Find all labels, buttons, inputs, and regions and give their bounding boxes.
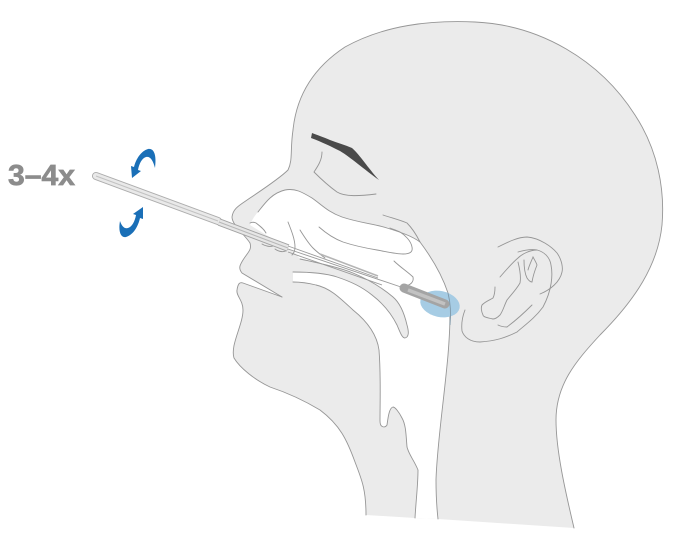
rotation arrow: lower [119, 207, 143, 237]
head and anatomy outlines [232, 22, 663, 528]
eye lines [314, 152, 376, 196]
outline: tongue and epiglottis [293, 282, 418, 518]
outline: soft palate [293, 259, 408, 338]
outline: upper turbinate [319, 227, 412, 254]
swab target area [418, 287, 462, 321]
outline: nostril [250, 222, 266, 233]
swab shaft middle [219, 222, 288, 248]
swab handle [96, 176, 218, 221]
swab [96, 176, 445, 304]
outline: chin and throat [233, 283, 366, 515]
rotation arrow: upper [131, 149, 156, 178]
eyebrow [311, 133, 379, 180]
outline: nose [232, 130, 293, 297]
outline: adenoid fold [394, 261, 413, 287]
repetition label: 3–4x [8, 160, 75, 192]
swab thin wire [288, 246, 401, 287]
swab tip [404, 288, 445, 304]
head silhouette [232, 22, 663, 528]
airway and nasal cavity [250, 189, 450, 519]
outline: nasal septum lines [288, 222, 295, 255]
outline: skull and neck [293, 22, 663, 528]
back wall line over target area [448, 293, 451, 325]
outline: sphenoid fold [383, 215, 420, 242]
ear [462, 237, 562, 342]
outline: nasal cavity roof and posterior wall [258, 189, 450, 519]
